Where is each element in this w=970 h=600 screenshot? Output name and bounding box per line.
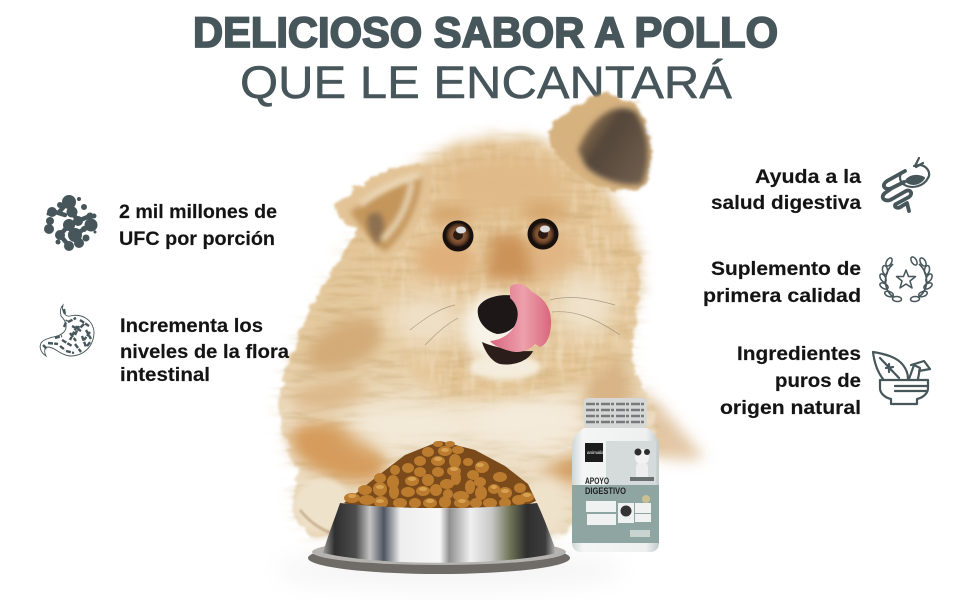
right eye	[528, 218, 558, 250]
face markings	[387, 155, 617, 380]
bottle info boxes	[586, 495, 651, 525]
text: ingredients: origen natural	[720, 398, 861, 419]
icon: mortar, pestle and leaf	[873, 352, 930, 404]
text: ingredients	[720, 344, 861, 419]
bottle dog	[630, 448, 654, 481]
text: quality	[703, 259, 861, 307]
icon: bacteria cluster	[44, 195, 98, 251]
icon: digestive tract	[883, 158, 929, 211]
kibble	[344, 441, 536, 508]
bottle body	[572, 428, 659, 552]
text: flora: niveles de la flora	[120, 342, 289, 363]
text: UFC: UFC por porción	[119, 229, 275, 250]
feature: digestive health	[711, 158, 929, 214]
nose	[478, 295, 520, 334]
text: ingredients: puros de	[775, 371, 861, 392]
tongue	[490, 284, 551, 352]
dog photo	[280, 95, 705, 540]
dog tail	[630, 390, 705, 460]
text: ingredients: Ingredientes	[737, 344, 861, 365]
product bottle	[572, 398, 659, 552]
text: flora	[120, 316, 289, 386]
feature: UFC	[44, 195, 277, 251]
text: digestive: salud digestiva	[711, 193, 861, 214]
floor shadow	[275, 550, 625, 590]
dog head	[372, 136, 639, 399]
bottle name	[585, 476, 626, 496]
text: quality: Suplemento de	[711, 259, 861, 280]
mouth	[482, 342, 533, 364]
feature: flora	[40, 305, 289, 386]
title	[193, 9, 778, 108]
text: quality: primera calidad	[703, 286, 861, 307]
bowl base	[308, 542, 570, 574]
text: flora: Incrementa los	[120, 316, 263, 337]
bottle logo	[585, 443, 605, 462]
bowl body	[323, 503, 557, 563]
food bowl	[308, 441, 570, 574]
bottle name: APOYO	[585, 476, 609, 486]
bottle cap	[584, 398, 647, 428]
feature: quality	[703, 256, 933, 307]
icon: laurel wreath with star	[879, 256, 933, 302]
dog fur shading	[282, 307, 630, 537]
feature: natural ingredients	[720, 344, 930, 419]
left eye	[442, 220, 474, 252]
title: DELICIOSO SABOR A POLLO	[193, 9, 778, 57]
bottle name: DIGESTIVO	[585, 486, 626, 496]
text: UFC: 2 mil millones de	[119, 202, 277, 223]
bottle lower text	[630, 530, 650, 537]
title: QUE LE ENCANTARÁ	[240, 57, 732, 108]
text: UFC	[119, 202, 277, 250]
bottle label photo	[606, 441, 656, 485]
text: digestive: Ayuda a la	[755, 167, 861, 188]
icon: stomach with bacteria	[40, 305, 94, 356]
bottle logo: animalia	[587, 450, 605, 455]
whiskers	[410, 298, 620, 345]
text: digestive	[711, 167, 861, 214]
dog body	[280, 190, 656, 540]
left ear	[333, 164, 432, 262]
bottle green band	[572, 485, 659, 543]
text: flora: intestinal	[120, 365, 210, 386]
right ear	[549, 95, 651, 191]
